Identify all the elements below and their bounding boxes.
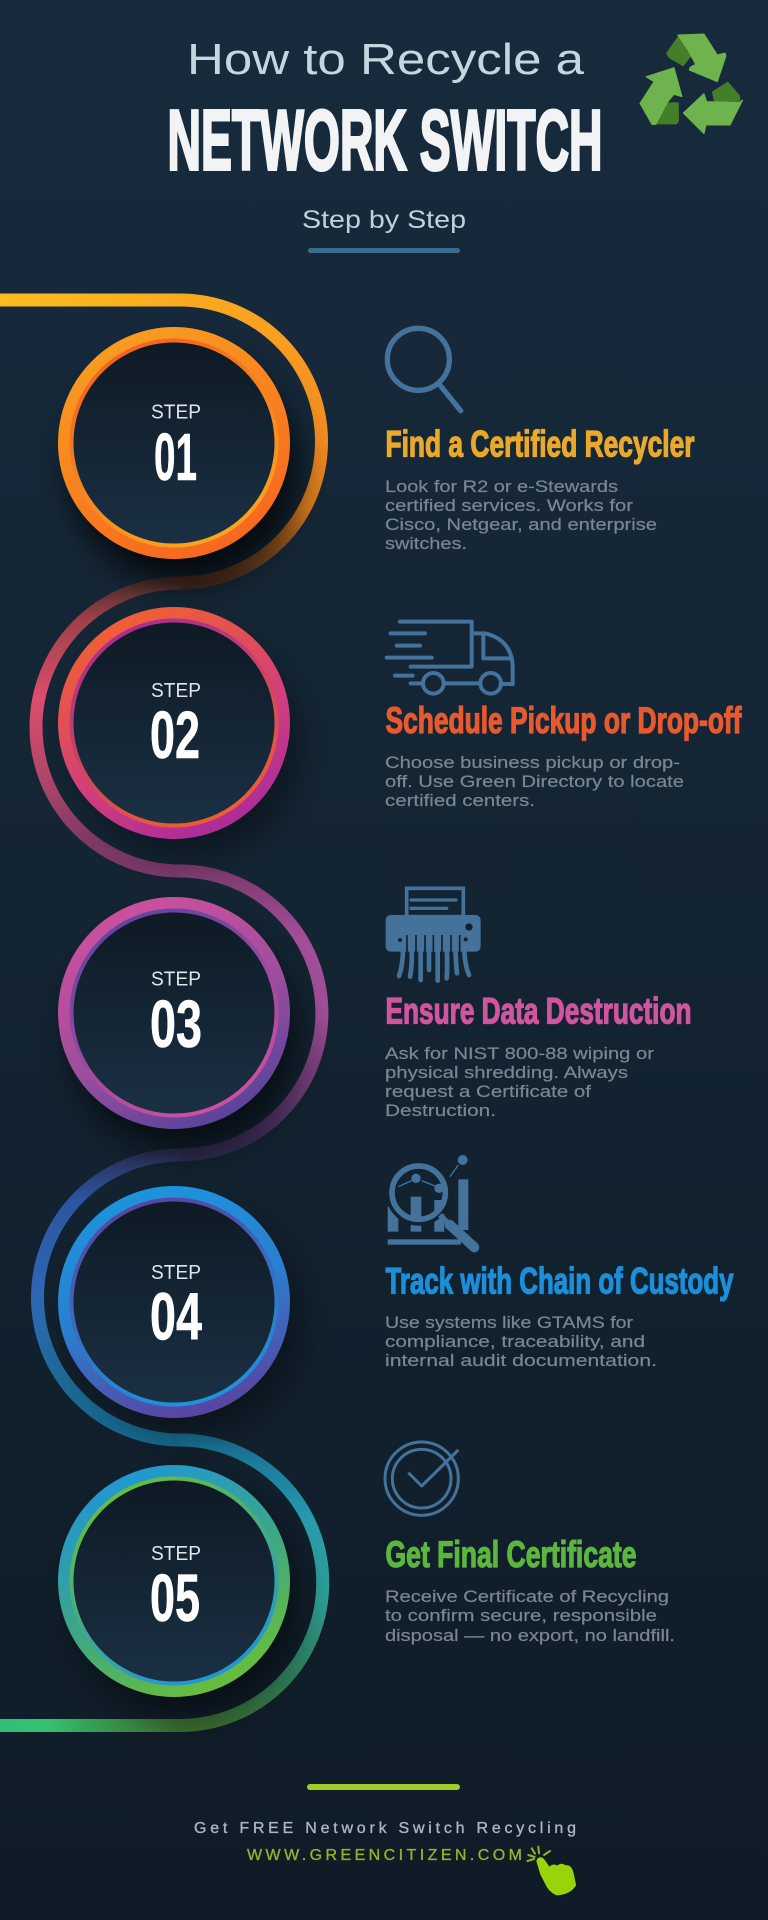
step 5 badge (58, 1465, 290, 1697)
step 2 number: 02 (150, 698, 200, 773)
description: step 5: Receive Certificate of Recycling (385, 1587, 669, 1606)
description: step 5: disposal — no export, no landfill. (385, 1626, 675, 1645)
step 3 label: STEP (151, 968, 201, 990)
subtitle: Step by Step (302, 206, 466, 234)
description: step 3: Ask for NIST 800-88 wiping or (385, 1044, 654, 1063)
description: step 1 (385, 477, 657, 553)
step 1 number: 01 (154, 420, 197, 495)
winding ribbon path (0, 300, 323, 1726)
description: step 5: to confirm secure, responsible (385, 1606, 657, 1625)
panel: step 2 text (385, 622, 742, 810)
step 1 label: STEP (151, 402, 201, 424)
step 2 label: STEP (151, 680, 201, 702)
description: step 2 (385, 753, 684, 810)
icon: check in circle (385, 1442, 458, 1515)
icon: chart under magnifier (388, 1155, 474, 1247)
icon: recycling arrows (640, 34, 743, 134)
header block (168, 35, 602, 253)
step 4 label: STEP (151, 1262, 201, 1284)
step 4 badge (58, 1186, 290, 1418)
step 5 number: 05 (150, 1561, 200, 1636)
description: step 4: Use systems like GTAMS for (385, 1313, 633, 1332)
description: step 3: physical shredding. Always (385, 1063, 628, 1082)
step 5 label: STEP (151, 1543, 201, 1565)
icon: delivery truck (387, 622, 513, 694)
panel: step 5 text (385, 1442, 675, 1645)
footer divider (307, 1784, 460, 1790)
call to action: Get FREE Network Switch Recycling (194, 1820, 576, 1837)
icon: magnifying glass (387, 328, 461, 411)
icon: paper shredder (386, 888, 481, 981)
step 3 number: 03 (150, 987, 202, 1062)
description: step 5 (385, 1587, 675, 1645)
subtitle underline (308, 248, 460, 253)
description: step 3: request a Certificate of (385, 1082, 591, 1101)
description: step 1: switches. (385, 534, 467, 553)
step 3 badge (58, 897, 290, 1129)
panel: step 1 text (385, 328, 695, 553)
description: step 2: off. Use Green Directory to locate (385, 772, 684, 791)
step 2 badge (58, 607, 290, 839)
title line 1: How to Recycle a (187, 35, 585, 84)
footer block (194, 1784, 576, 1894)
description: step 1: Cisco, Netgear, and enterprise (385, 515, 657, 534)
panel: step 4 text (385, 1155, 734, 1370)
description: step 4: compliance, traceability, and (385, 1332, 645, 1351)
description: step 1: certified services. Works for (385, 496, 633, 515)
description: step 3: Destruction. (385, 1101, 496, 1120)
description: step 4 (385, 1313, 657, 1370)
description: step 2: Choose business pickup or drop- (385, 753, 680, 772)
panel: step 3 text (385, 888, 692, 1120)
icon: clicking hand (527, 1847, 575, 1894)
website link: WWW.GREENCITIZEN.COM (247, 1847, 522, 1864)
description: step 1: Look for R2 or e-Stewards (385, 477, 618, 496)
step 4 number: 04 (150, 1280, 202, 1354)
heading: step 5: Get Final Certificate (386, 1533, 636, 1575)
description: step 2: certified centers. (385, 791, 535, 810)
step 1 badge (58, 327, 290, 559)
description: step 4: internal audit documentation. (385, 1351, 657, 1370)
description: step 3 (385, 1044, 654, 1120)
